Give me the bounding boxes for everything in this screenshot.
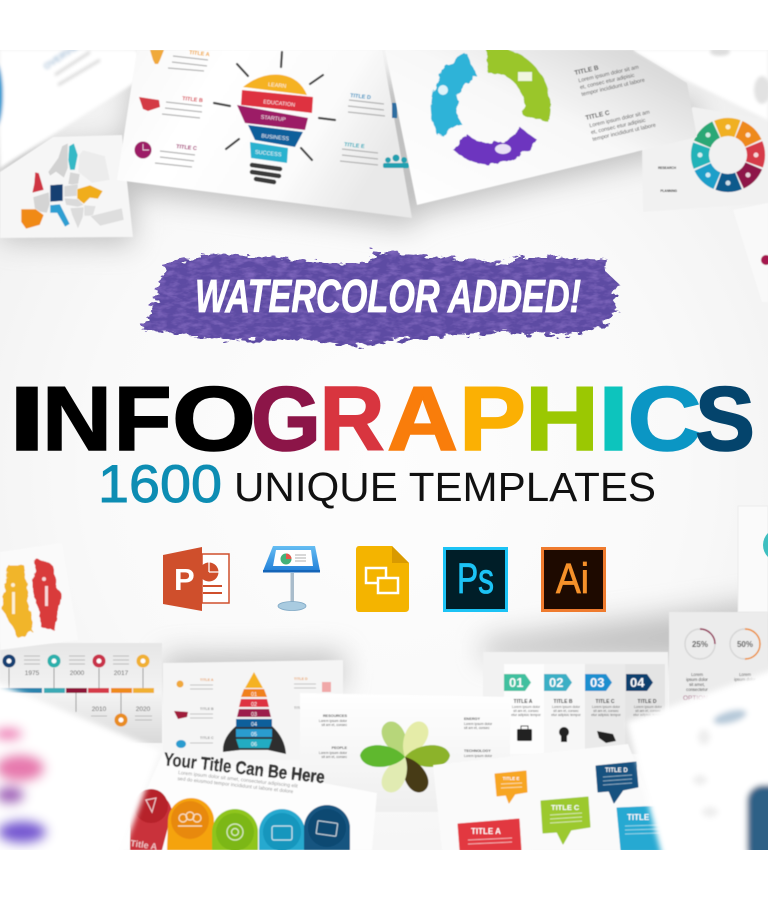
step text: sit am et, consec [513,709,539,713]
map of Europe [21,143,124,229]
rocket numbers: 05 [251,732,257,738]
blurred dark blue tab [747,785,768,865]
bulb slide titles: TITLE D [350,93,371,101]
gauge captions: consectetur [686,687,708,692]
title C text: Lorem ipsum dolor sit am [589,109,651,129]
wheel labels: PLANNING [660,189,678,193]
bulb layer: business [248,125,303,147]
flower labels left [319,714,348,759]
rocket slide titles: TITLE A [200,678,214,682]
subtitle: UNIQUE TEMPLATES [234,464,656,510]
gauge captions [686,672,756,692]
bulb labels: BUSINESS [261,134,290,142]
icon: briefcase [517,726,532,741]
timeline years: 2020 [136,706,151,713]
rocket slide titles: TITLE C [200,736,214,740]
orange bubble [495,771,527,803]
step tags: 03 [590,675,604,690]
panel: numbered steps slide [483,652,668,754]
rocket slide titles [200,677,308,740]
bulb labels: STARTUP [260,115,286,123]
title C text: TITLE C [585,110,611,122]
timeline markers [2,654,150,726]
title C text [584,110,656,142]
title B text: Lorem ipsum dolor sit am [578,64,640,84]
bulb layer: education [241,90,313,113]
title: INFOGRAPHICS: I [8,369,46,470]
title: INFOGRAPHICS: R [320,369,384,470]
blurred text [55,52,100,85]
step text: Lorem ipsum dolor [512,705,541,709]
rocket segments [241,689,267,697]
icon: handshake [139,97,160,111]
flower labels left: Lorem ipsum dolor [319,751,348,755]
step text: Lorem ipsum dolor [634,705,663,709]
panel: flower slide [300,693,510,812]
flower labels left: sit am et, consec [322,723,347,727]
gauge 50% [730,629,760,659]
rocket numbers: 04 [251,722,257,728]
gauge value 25%: 25% [692,640,708,649]
bulb rays [214,52,335,160]
rocket numbers: 01 [251,692,257,698]
bulb slide body text [155,56,385,167]
step text: sit am et, consec [593,709,619,713]
slide heading: Your Title Can Be Here [163,749,326,787]
step columns [504,664,665,754]
timeline years: 2017 [114,670,129,677]
title: INFOGRAPHICS: H [525,369,599,470]
step text: Lorem ipsum dolor [552,705,581,709]
title B text [574,65,645,96]
wheel labels [658,166,678,193]
bulb slide titles: TITLE A [189,50,210,58]
title: INFOGRAPHICS: C [628,369,702,470]
title B text: TITLE B [574,65,600,77]
rocket slide titles: TITLE D [294,677,308,681]
teal circle [763,533,768,557]
icon: bars [322,682,331,692]
dark blue bubble: TITLE D [605,768,628,774]
panel: timeline slide [0,643,162,743]
timeline years: 2010 [92,706,107,713]
icon: bulb [559,727,569,742]
title: INFOGRAPHICS: O [172,369,256,470]
panel: blurred white slide top left [0,50,136,168]
icon: handshake [174,711,188,719]
flower labels left: sit am et, consec [322,755,347,759]
step tags [504,674,653,691]
watercolor banner [142,252,620,346]
orange bubble: TITLE E [503,776,519,781]
flower labels right [464,717,493,758]
bulb screw base [252,165,280,182]
step text: etur adipisic tempor [551,713,582,717]
step tags: 02 [549,675,563,690]
flower labels right: ENERGY [464,717,481,721]
step titles: TITLE C [596,699,615,705]
title C text: tempor incididunt ut labore [592,123,657,143]
green bubble: TITLE C [551,803,580,812]
color tabs [130,789,350,852]
gauge captions: Lorem [691,672,703,677]
step text: etur adipisic tempor [591,713,622,717]
gauge value 50%: 50% [737,640,753,649]
light bulb infographic [214,52,335,182]
flower labels right: sit am et, consec [464,726,490,730]
rocket numbers: 06 [251,742,257,748]
icon: bulb [176,680,184,688]
blurred title [712,707,748,727]
tab icons [146,798,338,840]
rocket numbers [251,692,257,748]
step titles: TITLE A [514,699,533,705]
step tags: 01 [509,675,523,690]
rocket slide titles: TITLE E [294,706,308,710]
timeline years: 2000 [70,670,85,677]
green bubble [541,797,590,844]
gauge captions: ipsum dolor [686,677,708,682]
bulb slide titles: TITLE B [182,96,203,104]
panel: Europe map slide [0,135,133,238]
timeline bar [0,688,154,693]
panel: blurred white slide top right [633,48,768,120]
icon: Photoshop [444,548,506,610]
step text [511,705,664,717]
flower labels left: PEOPLE [332,746,347,750]
yellow brush stroke [3,565,33,638]
icon: Keynote [263,546,320,610]
timeline stems [9,668,143,714]
card shadows [0,60,768,690]
icon: bars [392,103,397,118]
bulb layer: success [250,142,288,163]
title B text: tempor incididunt ut labore [581,78,646,98]
title: INFOGRAPHICS: I [598,369,629,470]
rocket slide titles: TITLE B [200,707,214,711]
flower labels right: Lorem ipsum dolor [464,754,493,758]
brush stroke [142,252,620,346]
title C text: et, consec etur adipisic [590,118,647,136]
step text: sit am et, consec [635,709,661,713]
step titles: TITLE D [638,699,657,705]
title: INFOGRAPHICS: P [459,369,526,470]
flower labels left: Lorem ipsum dolor [319,719,348,723]
step text: Lorem ipsum dolor [592,705,621,709]
icon: Google Slides [356,546,409,612]
bulb layer: learn [243,74,307,95]
step text: etur adipisic tempor [511,713,542,717]
timeline years [25,670,151,713]
icon: Illustrator [542,548,604,610]
rocket slide text [190,684,316,743]
flower chart [360,717,450,797]
step text: etur adipisic tempor [633,713,664,717]
icon: PowerPoint [163,547,229,611]
wheel labels: RESEARCH [658,166,677,170]
rocket numbers: 02 [251,702,257,708]
blurred foreground sheet bottom right [627,668,768,865]
cyan bubble: TITLE [627,813,650,822]
icon: pie chart [134,142,152,158]
blurred blue circle [0,63,3,127]
gauge captions: sit amet, [689,682,705,687]
panel: watercolor bars slide [0,543,78,650]
ring icons [438,72,532,154]
subtitle count: 1600 [98,455,222,514]
rocket numbers: 03 [251,712,257,718]
rocket fins [223,726,286,754]
step titles: TITLE B [554,699,573,705]
title: INFOGRAPHICS: G [251,369,321,470]
bulb layer: startup [237,105,308,130]
gauge 25% [685,629,715,659]
bulb labels [255,82,295,158]
blurred marks [710,48,730,56]
bulb labels: LEARN [268,82,287,90]
timeline years: 1975 [25,670,40,677]
watercolor ring chart [444,60,538,154]
wheel chart [691,118,765,192]
step tags: 04 [630,675,645,690]
slide subtext: Lorem ipsum dolor sit amet, consectetur adipiscing elit [178,770,299,790]
gauge captions: Lorem [739,672,751,677]
title: INFOGRAPHICS: S [695,369,755,470]
step text: sit am et, consec [553,709,579,713]
panel: small right slide [760,254,768,266]
flower labels left: RESOURCES [323,714,347,718]
banner text: WATERCOLOR ADDED! [195,270,581,322]
red bubble [458,819,521,850]
rocket chart [223,672,286,754]
gauge captions: ipsum dolor [734,677,756,682]
timeline text [24,656,152,720]
title: INFOGRAPHICS [8,369,755,470]
icon: cloud [176,740,186,748]
panel: octagon wheel slide [642,107,766,193]
bulb labels: EDUCATION [263,99,295,109]
title B text: et, consec etur adipisic [579,73,636,91]
cyan bubble [617,806,668,850]
panel: right edge slide [738,506,768,612]
panel: percent slide [669,612,768,722]
red bubble: TITLE A [471,827,501,836]
flower labels right: TECHNOLOGY [464,749,491,753]
icon: Photoshop: Ps [457,555,494,603]
panel: rocket slide [163,660,343,760]
bulb slide titles: TITLE E [344,142,365,150]
title: INFOGRAPHICS: A [387,369,458,470]
tab label: Title A [130,838,158,852]
bulb labels: SUCCESS [255,150,282,158]
icon: people [383,154,409,168]
icon: PowerPoint: P [174,562,195,597]
title: INFOGRAPHICS: F [114,369,172,470]
panel: watercolor ring slide [385,50,697,205]
dark blue bubble [596,762,638,803]
panel: title slide [120,749,377,852]
panel: speech bubbles slide [433,744,670,850]
blurred watercolor splash [0,729,46,843]
blurred title: OVERVIEW [42,37,88,72]
blurred foreground sheet bottom left [0,680,160,860]
red brush stroke [32,558,60,630]
blurred text [693,729,718,817]
icon: Illustrator: Ai [556,555,589,603]
panel: light bulb slide [117,50,412,218]
step titles [514,699,657,705]
bulb slide titles: TITLE C [176,144,197,152]
wheel icons [698,124,758,186]
rocket nose [245,672,263,688]
icon: handshake [597,731,616,743]
slide subtext: sed do eiusmod tempor incididunt ut labore et dolore [177,776,294,795]
bulb slide titles [176,50,371,152]
option label: OPTION [683,695,708,702]
flower labels right: Lorem ipsum dolor [464,722,493,726]
brush stroke icons [11,577,48,614]
icon: bulb [150,50,164,64]
title: INFOGRAPHICS: N [42,369,112,470]
